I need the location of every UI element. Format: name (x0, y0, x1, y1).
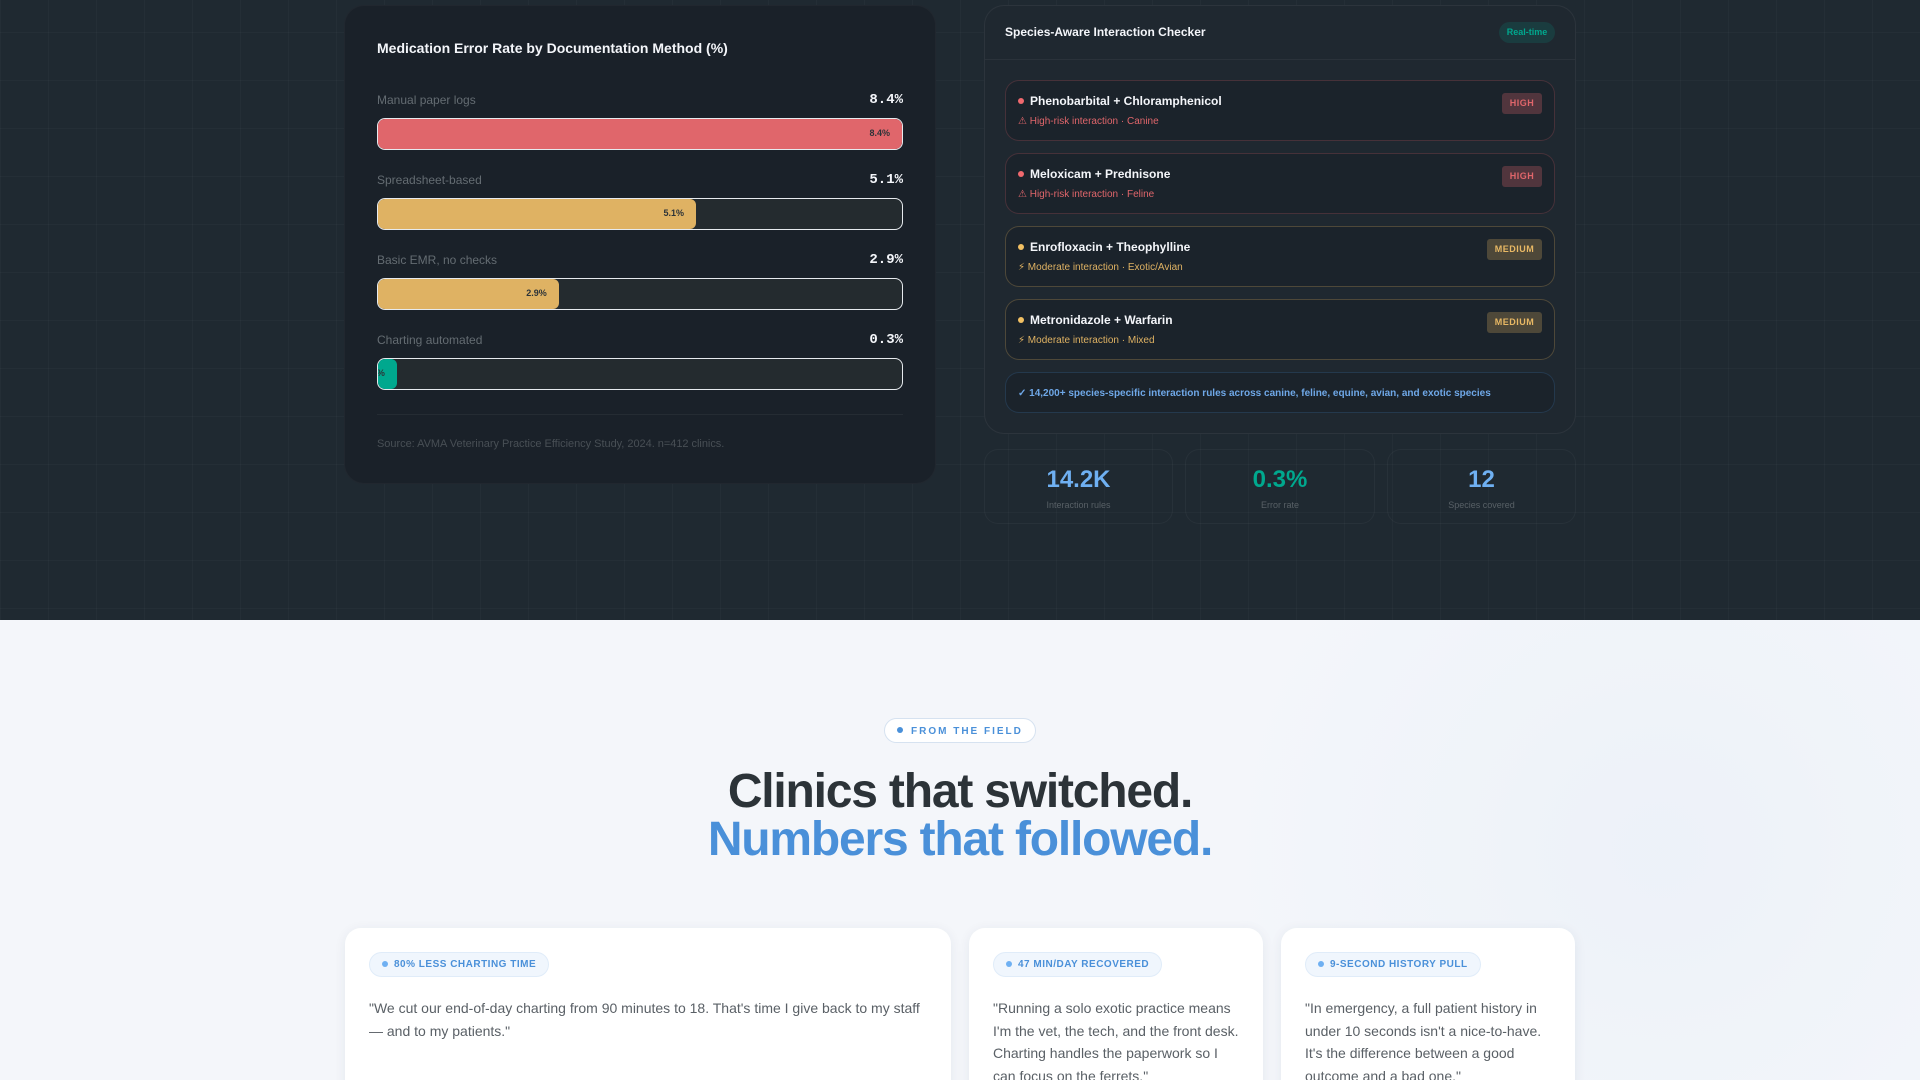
testimonial card 2: Charting handles the paperwork so I (993, 1045, 1218, 1061)
panel: species-aware interaction checker (984, 5, 1576, 434)
stat: error rate: Error rate (1261, 500, 1299, 510)
stat: interaction rules: 14.2K (1046, 466, 1111, 493)
bar label: basic EMR: Basic EMR, no checks (377, 253, 497, 267)
interaction row: Metronidazole + Warfarin: Metronidazole + Warfarin (1030, 313, 1173, 327)
interaction row: Meloxicam + Prednisone: ⚠ High-risk interaction · Feline (1018, 189, 1154, 200)
bar: spreadsheet (377, 198, 903, 230)
bar: basic EMR: 2.9% (526, 288, 547, 298)
bar value: 8.4%: 8.4% (869, 92, 903, 108)
interaction row: Phenobarbital + Chloramphenicol (1005, 80, 1555, 141)
interaction row: Meloxicam + Prednisone (1005, 153, 1555, 214)
rules note (1005, 372, 1555, 413)
testimonial card 2 (969, 928, 1263, 1080)
stat: error rate: 0.3% (1253, 466, 1307, 493)
source note: Source: AVMA Veterinary Practice Efficiency Study, 2024. n=412 clinics. (377, 438, 724, 450)
dark section background (0, 0, 1920, 620)
interaction row: Enrofloxacin + Theophylline (1005, 226, 1555, 287)
testimonial card 3: 9-SECOND HISTORY PULL (1330, 959, 1468, 970)
chart title: Medication Error Rate by Documentation Method (%) (377, 40, 728, 56)
testimonial card 3 (1281, 928, 1575, 1080)
heading (708, 765, 1212, 866)
checker title: Species-Aware Interaction Checker (1005, 25, 1206, 39)
bar label: charting automated: Charting automated (377, 333, 482, 347)
bar: spreadsheet: 5.1% (664, 208, 684, 218)
testimonial card 1: "We cut our end-of-day charting from 90 minutes to 18. That's time I give back to my staff (369, 1000, 920, 1016)
bar: basic EMR (377, 278, 903, 310)
interaction row: Metronidazole + Warfarin (1005, 299, 1555, 360)
interaction row: Metronidazole + Warfarin: ⚡︎ Moderate interaction · Mixed (1018, 335, 1155, 346)
bar: manual paper logs: 8.4% (869, 128, 890, 138)
stat: interaction rules (984, 449, 1173, 524)
testimonial card 1 (345, 928, 951, 1080)
testimonial card 2: I'm the vet, the tech, and the front desk. (993, 1023, 1238, 1039)
testimonial card 3: It's the difference between a good (1305, 1045, 1514, 1061)
interaction row: Phenobarbital + Chloramphenicol: ⚠ High-risk interaction · Canine (1018, 116, 1159, 127)
testimonial card 1: — and to my patients." (369, 1023, 510, 1039)
real-time badge (1499, 22, 1555, 43)
stat: error rate (1185, 449, 1375, 524)
interaction row: Enrofloxacin + Theophylline: ⚡︎ Moderate interaction · Exotic/Avian (1018, 262, 1183, 273)
bar value: 0.3%: 0.3% (869, 332, 903, 348)
testimonial card 2: 47 MIN/DAY RECOVERED (1018, 959, 1149, 970)
testimonial card 1: 80% LESS CHARTING TIME (394, 959, 536, 970)
bar: manual paper logs (377, 118, 903, 150)
interaction row: Enrofloxacin + Theophylline: Enrofloxacin + Theophylline (1030, 240, 1190, 254)
bar label: spreadsheet: Spreadsheet-based (377, 173, 482, 187)
stat: species covered (1387, 449, 1576, 524)
eyebrow pill: from the field (884, 718, 1036, 743)
testimonial card 3: "In emergency, a full patient history in (1305, 1000, 1537, 1016)
heading: Clinics that switched. (728, 765, 1192, 818)
interaction row: Meloxicam + Prednisone: Meloxicam + Prednisone (1030, 167, 1170, 181)
interaction row: Meloxicam + Prednisone: HIGH (1510, 171, 1534, 181)
panel: medication error rate chart (344, 5, 936, 484)
interaction row: Phenobarbital + Chloramphenicol: Phenobarbital + Chloramphenicol (1030, 94, 1222, 108)
stat: species covered: 12 (1468, 466, 1495, 493)
heading: Numbers that followed. (708, 813, 1212, 866)
testimonial card 2: "Running a solo exotic practice means (993, 1000, 1231, 1016)
bar value: 5.1%: 5.1% (869, 172, 903, 188)
stat: interaction rules: Interaction rules (1046, 500, 1111, 510)
bar: charting automated (377, 358, 903, 390)
eyebrow pill: from the field: FROM THE FIELD (911, 726, 1023, 737)
bar label: manual paper logs: Manual paper logs (377, 93, 476, 107)
rules note: ✓ 14,200+ species-specific interaction rules across canine, feline, equine, avian, and exotic species (1018, 388, 1491, 399)
interaction row: Phenobarbital + Chloramphenicol: HIGH (1510, 98, 1534, 108)
light testimonial section (0, 620, 1920, 1080)
bar value: 2.9%: 2.9% (869, 252, 903, 268)
interaction row: Enrofloxacin + Theophylline: MEDIUM (1495, 244, 1534, 254)
real-time badge: Real-time (1507, 27, 1547, 37)
testimonial card 3: under 10 seconds isn't a nice-to-have. (1305, 1023, 1541, 1039)
stat: species covered: Species covered (1448, 500, 1515, 510)
interaction row: Metronidazole + Warfarin: MEDIUM (1495, 317, 1534, 327)
